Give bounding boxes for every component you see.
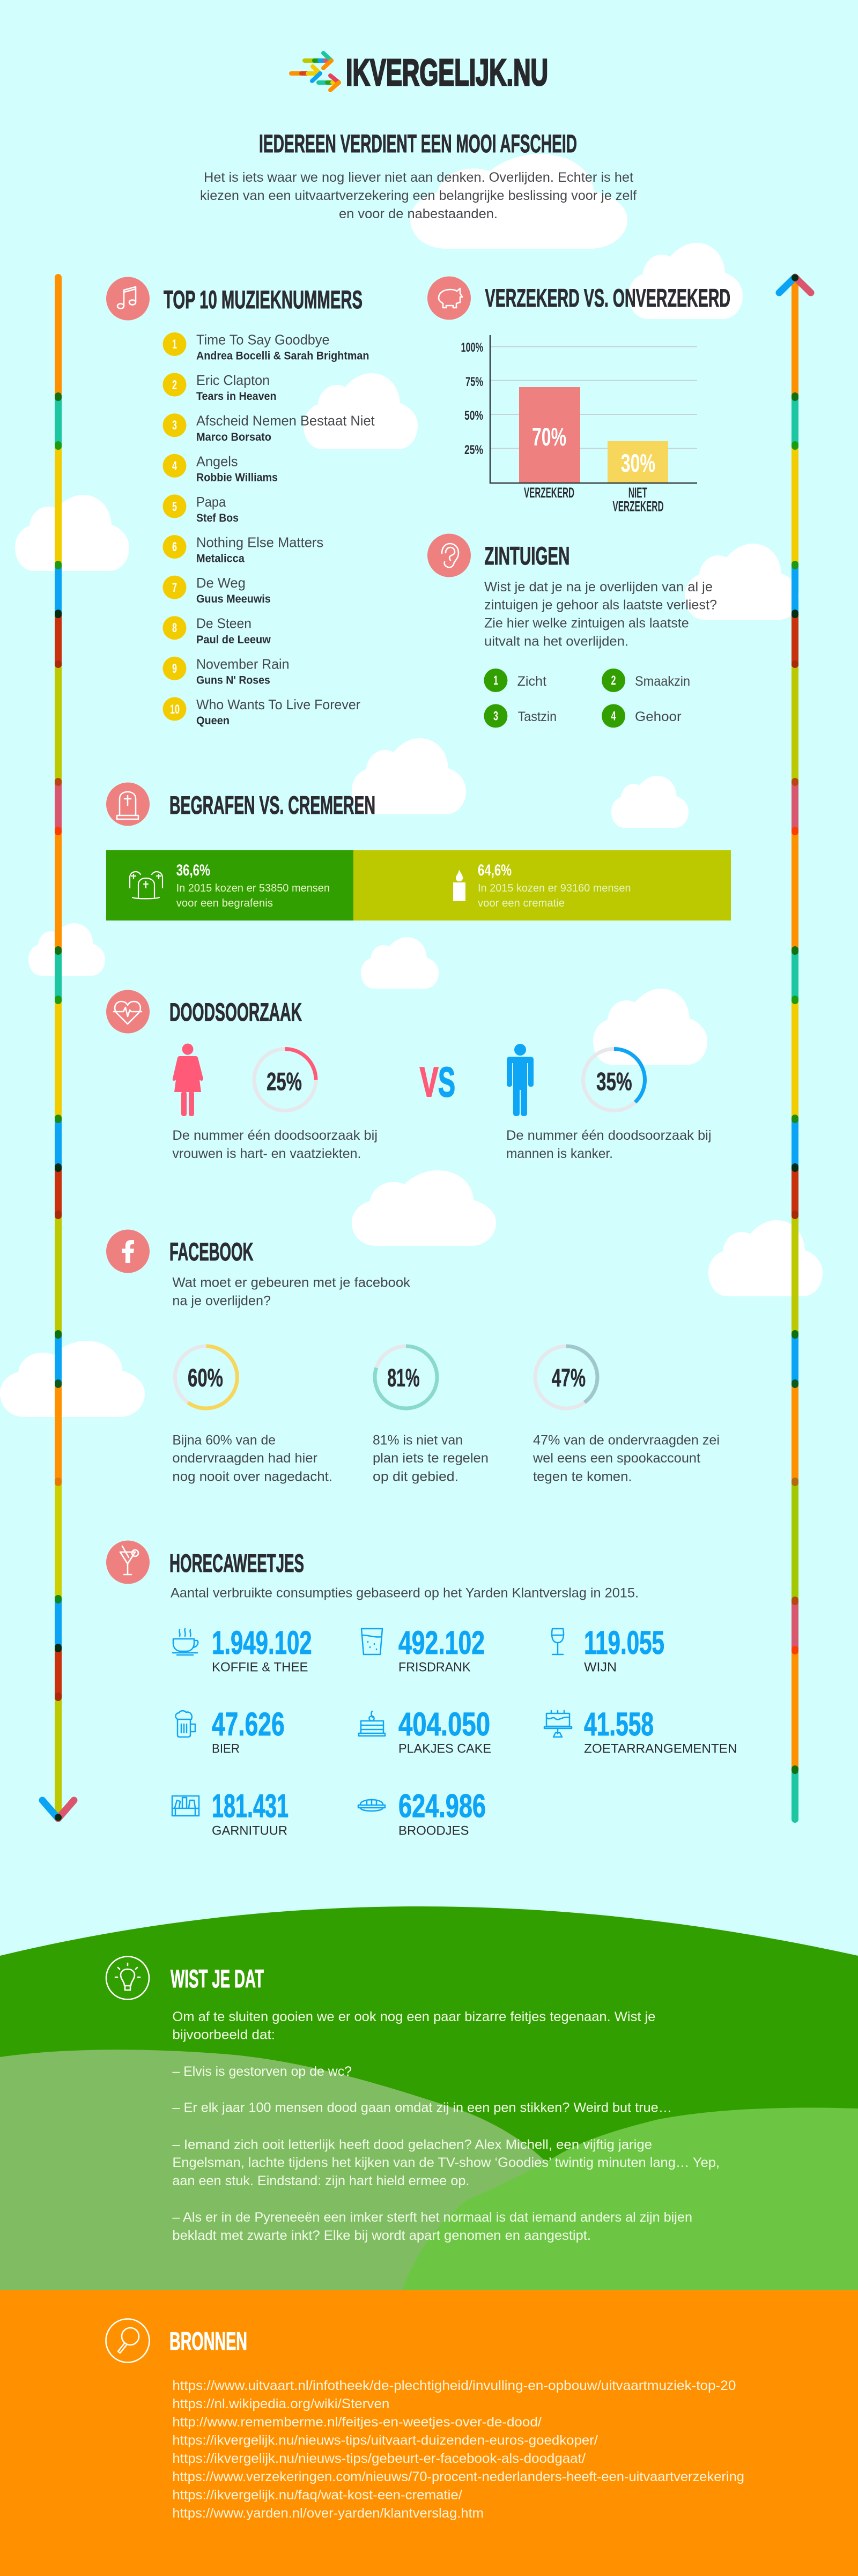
vs label: V: [420, 1058, 439, 1105]
heading: BEGRAFEN VS. CREMEREN: [169, 791, 375, 819]
panel: bronnen: [0, 2290, 858, 2576]
text: 81%: 81% is niet van: [373, 1432, 463, 1447]
list of songs: 2: [172, 378, 177, 392]
source links: https://nl.wikipedia.org/wiki/Sterven: [172, 2396, 389, 2411]
stat: garnituur: [172, 1788, 289, 1838]
stat bar: begrafenis: In 2015 kozen er 53850 mensen: [176, 882, 330, 894]
bar: verzekerd 70%: [519, 387, 580, 483]
bar: niet verzekerd 30%: [608, 441, 668, 483]
stat: broodjes: [358, 1788, 486, 1838]
intro text: Zie hier welke zintuigen als laatste: [484, 616, 689, 631]
list of songs: De Steen: [196, 615, 252, 632]
bar: niet verzekerd 30%: 30%: [621, 449, 655, 477]
icon: wine glass: [552, 1629, 564, 1654]
intro text: Wist je dat je na je overlijden van al je: [484, 580, 713, 595]
stat: zoetarrangementen: [544, 1706, 737, 1756]
text: 47%: 47% van de ondervraagden zei: [533, 1432, 720, 1447]
facts text: Engelsman, lachte tijdens het kijken van de TV-show ‘Goodies’ twintig minuten lang… Yep,: [172, 2155, 720, 2170]
icon: piggy bank: [427, 277, 471, 320]
source links: https://ikvergelijk.nu/nieuws-tips/uitvaart-duizenden-euros-goedkoper/: [172, 2433, 598, 2448]
list of songs: 5: [172, 500, 177, 514]
source links: https://www.verzekeringen.com/nieuws/70-procent-nederlanders-heeft-een-uitvaartverzekering: [172, 2469, 744, 2484]
icon: cocktail: [106, 1541, 150, 1584]
ring: 25%: [254, 1049, 316, 1111]
list of songs: Andrea Bocelli & Sarah Brightman: [196, 350, 369, 362]
list of senses: 1: [493, 673, 498, 688]
intro text: Wat moet er gebeuren met je facebook: [172, 1275, 411, 1290]
source links: [172, 2378, 744, 2521]
stat: broodjes: 624.986: [398, 1788, 486, 1824]
stat: wijn: WIJN: [584, 1660, 617, 1675]
facts text: aan een stuk. Eindstand: zijn hart hield ermee op.: [172, 2173, 469, 2188]
list of songs: Robbie Williams: [196, 471, 278, 484]
stat bar: crematie: In 2015 kozen er 93160 mensen: [478, 882, 631, 894]
ring: 47%: 47%: [552, 1363, 586, 1392]
panel: wist je dat: [0, 1906, 858, 2291]
logo wordmark: IKVERGELIJK.NU: [346, 51, 548, 93]
intro text: kiezen van een uitvaartverzekering een belangrijke beslissing voor je zelf: [200, 188, 637, 203]
heading: DOODSOORZAAK: [169, 998, 302, 1026]
title: IEDEREEN VERDIENT EEN MOOI AFSCHEID: [259, 129, 577, 158]
icon: facebook: [106, 1230, 150, 1273]
stat: zoetarrangementen: ZOETARRANGEMENTEN: [584, 1741, 737, 1756]
text: men: mannen is kanker.: [506, 1146, 613, 1161]
icon: sandwich: [358, 1799, 385, 1811]
bar chart: VERZEKERD: [612, 499, 664, 515]
list of senses: Zicht: [517, 674, 546, 689]
list of senses: Smaakzin: [635, 674, 690, 689]
facts text: bekladt met zwarte inkt? Elke bij wordt apart genomen en aangestipt.: [172, 2228, 591, 2243]
icon: magnifying glass: [106, 2319, 149, 2362]
list of songs: Time To Say Goodbye: [196, 331, 329, 347]
list of songs: Angels: [196, 453, 238, 469]
list of songs: 3: [172, 418, 177, 433]
text: women: De nummer één doodsoorzaak bij: [172, 1128, 378, 1143]
list of senses: Tastzin: [518, 709, 557, 724]
bar chart: 100%: [461, 340, 483, 355]
stat: plakjes cake: 404.050: [398, 1706, 490, 1742]
stat: bier: BIER: [212, 1741, 240, 1756]
background hills: [0, 1906, 858, 2291]
ring: 60%: [175, 1346, 237, 1408]
intro text: [200, 170, 637, 221]
list of songs: Papa: [196, 494, 226, 510]
heading: HORECAWEETJES: [169, 1549, 304, 1577]
facts text: Om af te sluiten gooien we er ook nog een paar bizarre feitjes tegenaan. Wist je: [172, 2009, 655, 2024]
icon: candle: [453, 870, 465, 901]
stat: koffie en thee: [173, 1624, 312, 1675]
clouds background: [0, 154, 823, 1417]
list of songs: 8: [172, 621, 177, 635]
list of songs: Guns N' Roses: [196, 674, 270, 686]
bar chart: 50%: [464, 409, 483, 423]
icon: music note: [106, 277, 150, 321]
text: 47%: [532, 1432, 720, 1484]
stat bar: crematie: voor een crematie: [478, 897, 565, 909]
stat: wijn: [552, 1624, 664, 1675]
list of songs: 7: [172, 581, 177, 595]
bar chart: VERZEKERD: [524, 485, 574, 501]
logo: [291, 51, 548, 93]
icon: heart: [106, 990, 150, 1034]
ring: 60%: 60%: [188, 1363, 223, 1392]
list of songs: Paul de Leeuw: [196, 634, 271, 646]
source links: https://ikvergelijk.nu/faq/wat-kost-een-crematie/: [172, 2488, 462, 2503]
panel: horecaweetjes: [106, 1541, 737, 1838]
icon: light bulb: [106, 1957, 149, 2000]
list of songs: 9: [172, 662, 177, 676]
icon: ear: [427, 534, 471, 577]
list of songs: Metalicca: [196, 553, 245, 565]
stat: broodjes: BROODJES: [398, 1824, 469, 1838]
heading: TOP 10 MUZIEKNUMMERS: [164, 285, 363, 314]
text: 47%: wel eens een spookaccount: [532, 1451, 700, 1466]
ring: 25%: 25%: [267, 1067, 302, 1096]
stat: frisdrank: FRISDRANK: [398, 1660, 471, 1675]
intro text: Het is iets waar we nog liever niet aan denken. Overlijden. Echter is het: [204, 170, 633, 185]
stat: garnituur: GARNITUUR: [212, 1824, 287, 1838]
icon: glass: [361, 1629, 382, 1654]
stat: frisdrank: [361, 1624, 485, 1675]
list of senses: 4: [611, 709, 616, 724]
bar chart: 75%: [465, 375, 483, 389]
stat: zoetarrangementen: 41.558: [584, 1706, 654, 1742]
intro text: [172, 1275, 411, 1309]
panel: begrafen vs cremeren: [106, 783, 731, 920]
bar chart: 25%: [464, 443, 483, 457]
ring: 81%: 81%: [387, 1363, 420, 1392]
text: 60%: Bijna 60% van de: [172, 1432, 276, 1447]
stat: koffie en thee: KOFFIE & THEE: [212, 1660, 308, 1675]
vs label: S: [438, 1058, 455, 1105]
text: men: [506, 1128, 711, 1161]
text: 81%: plan iets te regelen: [373, 1451, 489, 1466]
text: women: vrouwen is hart- en vaatziekten.: [172, 1146, 361, 1161]
text: 81%: [373, 1432, 489, 1484]
facts text: – Elvis is gestorven op de wc?: [172, 2064, 352, 2079]
list of senses: [484, 669, 690, 727]
list of songs: De Weg: [196, 575, 246, 591]
logo arrows: [291, 53, 339, 90]
stat: plakjes cake: [359, 1706, 491, 1756]
ring: 35%: [583, 1049, 645, 1111]
intro text: uitvalt na het overlijden.: [484, 634, 628, 649]
heading: WIST JE DAT: [171, 1964, 264, 1993]
list of songs: November Rain: [196, 656, 290, 672]
stat: koffie en thee: 1.949.102: [212, 1624, 312, 1661]
heading: ZINTUIGEN: [484, 541, 569, 570]
stat: plakjes cake: PLAKJES CAKE: [398, 1741, 491, 1756]
icon: garnish tray: [172, 1796, 199, 1816]
icon: coffee: [173, 1629, 198, 1655]
list of songs: [163, 331, 375, 727]
text: men: De nummer één doodsoorzaak bij: [506, 1128, 711, 1143]
list of songs: Afscheid Nemen Bestaat Niet: [196, 413, 375, 429]
intro text: zintuigen je gehoor als laatste verliest?: [484, 598, 717, 613]
intro text: Aantal verbruikte consumpties gebaseerd op het Yarden Klantverslag in 2015.: [171, 1586, 639, 1601]
list of songs: 1: [172, 337, 177, 352]
stat: wijn: 119.055: [584, 1624, 664, 1661]
list of songs: 10: [170, 702, 180, 717]
stat bar: begrafenis: 36,6%: [176, 862, 210, 879]
source links: https://ikvergelijk.nu/nieuws-tips/gebeurt-er-facebook-als-doodgaat/: [172, 2451, 586, 2466]
list of songs: Nothing Else Matters: [196, 534, 323, 550]
icon: cake stand: [544, 1711, 572, 1737]
bar chart: [461, 335, 697, 515]
panel: zintuigen: [427, 534, 717, 727]
facts text: bijvoorbeeld dat:: [172, 2028, 275, 2043]
list of senses: 2: [611, 673, 616, 688]
source links: https://www.yarden.nl/over-yarden/klantverslag.htm: [172, 2506, 484, 2521]
stat: bier: 47.626: [212, 1706, 285, 1742]
facts text: – Er elk jaar 100 mensen dood gaan omdat zij in een pen stikken? Weird but true…: [172, 2100, 672, 2115]
list of senses: Gehoor: [635, 709, 682, 724]
list of senses: 3: [493, 709, 498, 724]
panel: facebook: [106, 1230, 720, 1484]
stat: garnituur: 181.431: [212, 1788, 289, 1824]
icon: cake slice: [359, 1711, 385, 1736]
intro text: na je overlijden?: [172, 1294, 271, 1309]
stat: bier: [175, 1706, 285, 1756]
source links: http://www.rememberme.nl/feitjes-en-weetjes-over-de-dood/: [172, 2415, 542, 2430]
icon: beer: [175, 1711, 195, 1737]
text: women: [172, 1128, 378, 1161]
stat bar: begrafenis: voor een begrafenis: [176, 897, 273, 909]
stat bar: begrafenis: [106, 850, 353, 920]
ring: 47%: [535, 1346, 597, 1408]
icon: man: [507, 1044, 534, 1116]
source links: https://www.uitvaart.nl/infotheek/de-plechtigheid/invulling-en-opbouw/uitvaartmuziek-top-20: [172, 2378, 736, 2393]
icon: graves: [130, 872, 162, 899]
intro text: en voor de nabestaanden.: [339, 206, 498, 221]
text: 60%: nog nooit over nagedacht.: [172, 1469, 332, 1484]
right arrow rail: [779, 274, 811, 1823]
intro text: [484, 580, 717, 649]
stat bar: crematie: [353, 850, 731, 920]
left arrow rail: [42, 274, 74, 1821]
facts text: [172, 2009, 720, 2243]
bar: verzekerd 70%: 70%: [532, 422, 566, 451]
list of songs: Guus Meeuwis: [196, 593, 271, 605]
stat bar: crematie: 64,6%: [478, 862, 512, 879]
panel: doodsoorzaak: [106, 990, 711, 1161]
list of songs: Who Wants To Live Forever: [196, 696, 360, 712]
heading: FACEBOOK: [169, 1237, 253, 1266]
text: 60%: [172, 1432, 332, 1484]
list of songs: 4: [172, 459, 177, 473]
icon: woman: [173, 1043, 203, 1116]
list of songs: Eric Clapton: [196, 372, 270, 388]
list of songs: Stef Bos: [196, 512, 239, 524]
list of songs: Tears in Heaven: [196, 390, 277, 403]
stat: frisdrank: 492.102: [398, 1624, 485, 1661]
ring: 81%: [375, 1346, 437, 1408]
text: 81%: op dit gebied.: [373, 1469, 458, 1484]
list of songs: Queen: [196, 715, 230, 727]
text: 60%: ondervraagden had hier: [172, 1451, 317, 1466]
list of songs: Marco Borsato: [196, 431, 271, 443]
icon: gravestone: [106, 783, 150, 826]
heading: BRONNEN: [169, 2327, 247, 2355]
facts text: – Als er in de Pyreneeën een imker sterft het normaal is dat iemand anders al zijn bijen: [172, 2210, 692, 2225]
panel: verzekerd vs onverzekerd: [427, 277, 730, 515]
list of songs: 6: [172, 540, 177, 554]
text: 47%: tegen te komen.: [533, 1469, 632, 1484]
panel: top 10 muzieknummers: [106, 277, 375, 727]
bar chart: NIET: [628, 485, 647, 501]
ring: 35%: 35%: [596, 1067, 632, 1096]
facts text: – Iemand zich ooit letterlijk heeft dood gelachen? Alex Michell, een vijftig jarige: [172, 2137, 652, 2152]
